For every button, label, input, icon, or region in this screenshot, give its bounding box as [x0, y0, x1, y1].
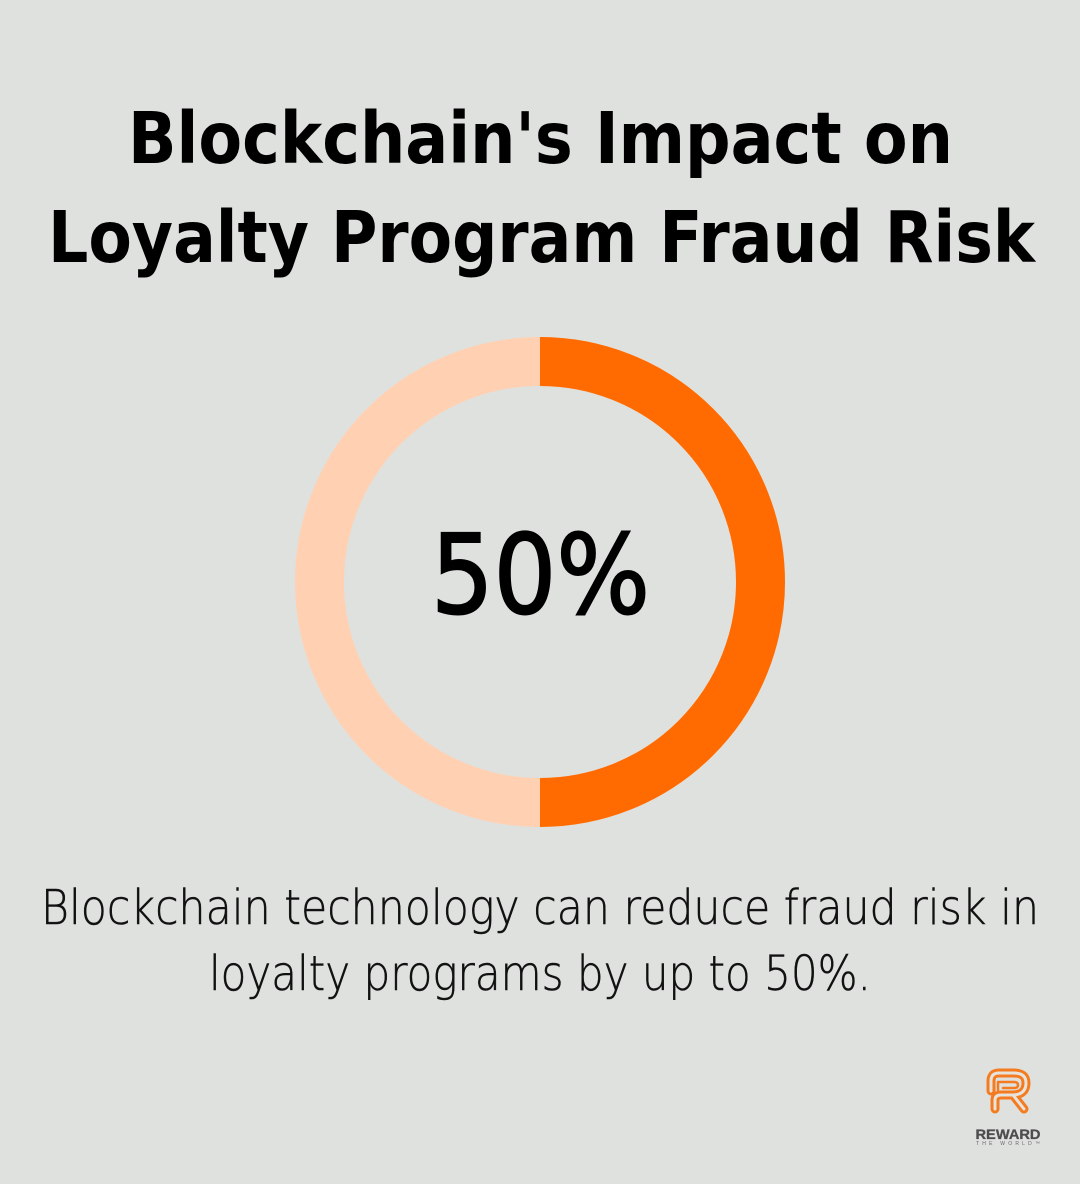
title: Blockchain's Impact on — [128, 97, 953, 180]
logo tagline: THE WORLD™ — [976, 1141, 1040, 1147]
title — [48, 97, 1037, 279]
logo wordmark: REWARD — [976, 1127, 1041, 1142]
center value: 50% — [431, 511, 650, 639]
description text — [41, 880, 1039, 1002]
icon: R mark — [991, 1073, 1026, 1109]
description text: loyalty programs by up to 50%. — [209, 946, 871, 1002]
donut chart: 50% — [320, 362, 760, 802]
logo: Reward the World — [976, 1073, 1041, 1147]
